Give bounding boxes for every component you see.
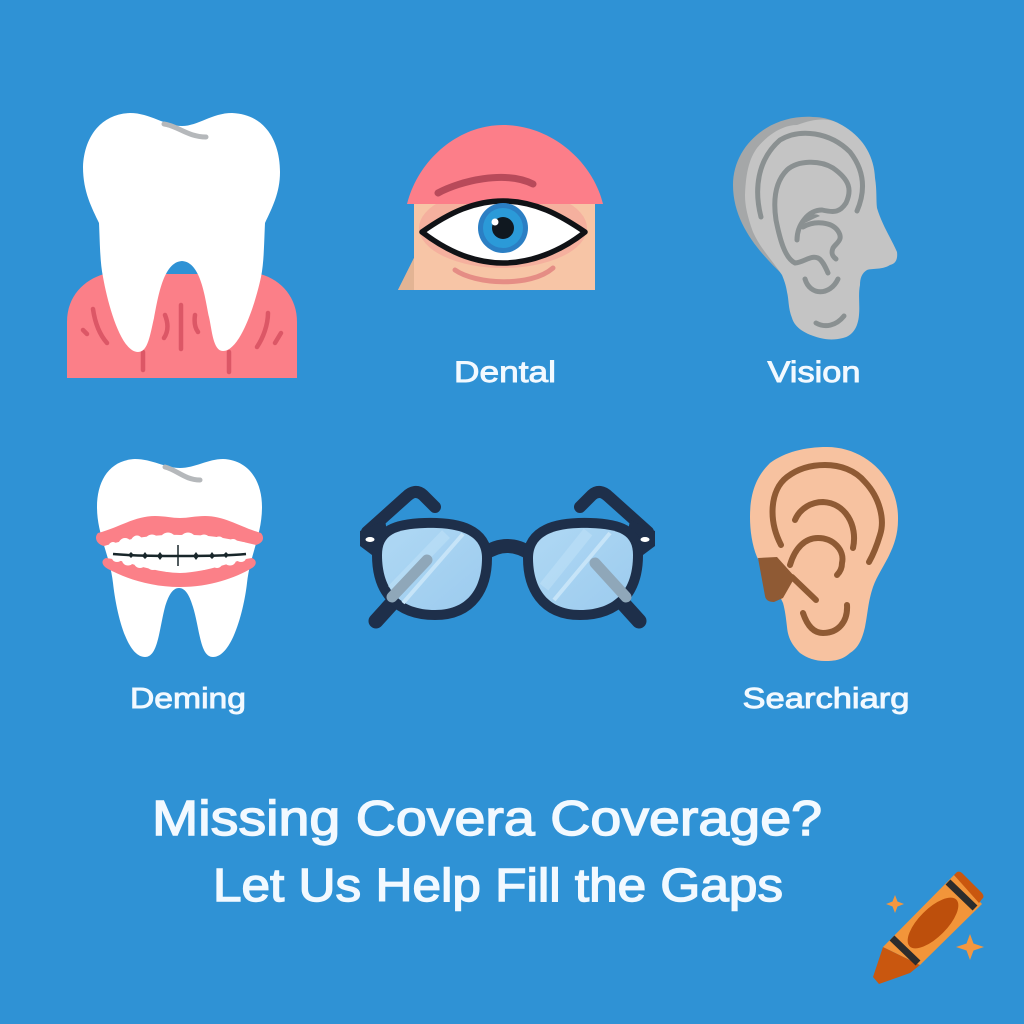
label: Searchiarg: Searchiarg	[742, 683, 910, 715]
icon: tooth with gums	[67, 113, 297, 378]
label: Dental: Dental	[454, 356, 556, 389]
label: Deming: Deming	[130, 683, 246, 715]
icon: tooth with dentures	[96, 459, 263, 657]
title line 2: Let Us Help Fill the Gaps	[213, 859, 783, 911]
icon: eye with eyelid	[398, 125, 603, 290]
icon: crayon with sparkles	[873, 872, 984, 984]
label: Vision: Vision	[768, 356, 860, 389]
title line 1: Missing Covera Coverage?	[152, 792, 822, 846]
icon: grey ear and head	[733, 117, 897, 340]
icon: peach ear with hearing aid	[750, 447, 898, 661]
icon: glasses	[360, 492, 655, 621]
